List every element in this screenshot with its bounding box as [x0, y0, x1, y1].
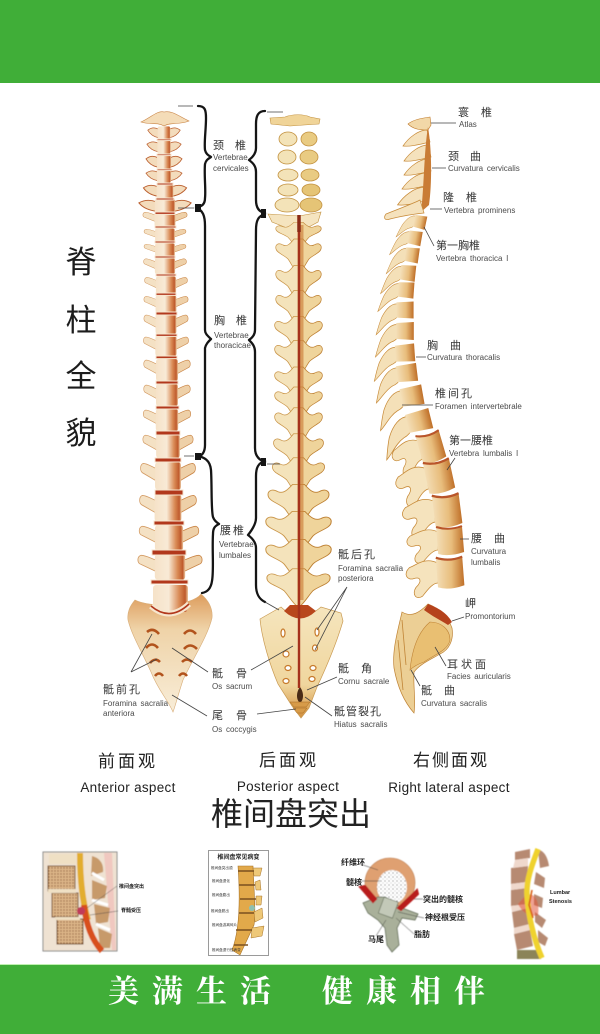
label: vertebra prominens: 隆椎 — [443, 190, 489, 204]
label: lumbar vertebrae: Vertebrae — [219, 540, 254, 549]
label: lumbar curvature: 腰曲 — [471, 532, 517, 545]
labels: sagittal diagram — [119, 883, 144, 914]
label: anterior sacral foramina: Foramina sacralia — [103, 699, 169, 708]
panel: common disc lesions diagram: 椎间盘常见病变 — [217, 853, 260, 861]
panel: common disc lesions diagram: 椎间盘退化 — [212, 878, 230, 883]
caption: anterior aspect — [80, 752, 176, 795]
thoracic processes lateral — [372, 213, 418, 460]
label: lumbar curvature: Curvatura — [471, 547, 507, 556]
panel: common disc lesions diagram: 椎间盘退行性病变 — [212, 947, 241, 952]
bracket junction blobs — [195, 204, 266, 466]
thoracic bodies lateral — [395, 214, 433, 434]
label: sacrum: Os sacrum — [212, 682, 253, 691]
label: thoracic vertebrae: thoracicae — [214, 341, 251, 350]
labels: transverse section: 纤维环 — [341, 857, 365, 867]
bracket: posterior lumbar — [248, 461, 265, 602]
lumbar vertebrae lateral — [390, 430, 464, 598]
panel: common disc lesions diagram — [208, 850, 268, 956]
label: auricular surface: Facies auricularis — [447, 672, 511, 681]
labels: lumbar stenosis: Lumbar — [550, 890, 571, 896]
label: cervical curvature — [448, 150, 520, 173]
title: 脊柱全貌: 貌 — [66, 416, 96, 451]
label: sacral curvature — [421, 684, 487, 708]
slogan — [108, 974, 498, 1009]
bracket: posterior cervical — [249, 111, 265, 213]
slogan: 美满生活 — [108, 974, 284, 1009]
label: sacral cornu: Cornu sacrale — [338, 677, 390, 686]
atlas lateral — [408, 117, 431, 130]
label: promontory: 岬 — [465, 597, 476, 610]
label: auricular surface — [447, 657, 511, 681]
caption: right lateral aspect: Right lateral aspect — [388, 780, 510, 795]
bracket: anterior cervical — [196, 106, 211, 207]
label: anterior sacral foramina — [103, 682, 169, 718]
label: intervertebral foramen: Foramen intervertebrale — [435, 402, 522, 411]
label: thoracic curvature: Curvatura thoracalis — [427, 353, 500, 362]
label: lumbar curvature: lumbalis — [471, 558, 500, 567]
leader lines — [131, 106, 469, 716]
label: first thoracic vertebra: 第一胸椎 — [436, 238, 480, 252]
panel: anterior spine illustration — [128, 112, 212, 712]
bracket: posterior thoracic — [249, 214, 265, 462]
label: first lumbar vertebra — [449, 433, 518, 458]
label: thoracic vertebrae: 胸椎 — [214, 313, 258, 327]
label: sacral curvature: 骶曲 — [421, 684, 467, 697]
label: posterior sacral foramina: Foramina sacralia — [338, 564, 404, 573]
title: 脊柱全貌: 脊 — [66, 245, 96, 280]
slogan: 健康相伴 — [322, 974, 498, 1009]
sacrum posterior — [260, 605, 343, 718]
label: intervertebral foramen: 椎间孔 — [435, 386, 474, 400]
bracket: anterior thoracic — [196, 208, 211, 457]
panel: common disc lesions diagram: 椎间盘脱出 — [211, 908, 229, 913]
bottom green band — [0, 964, 600, 1034]
label: lumbar curvature — [471, 532, 517, 567]
label: atlas: 寰椎 — [458, 105, 504, 119]
bracket: anterior lumbar — [197, 456, 219, 593]
label: cervical vertebrae: cervicales — [213, 164, 249, 173]
label: first lumbar vertebra: 第一腰椎 — [449, 433, 493, 447]
panel: sagittal disc herniation diagram — [43, 852, 118, 951]
label: sacral hiatus: 骶管裂孔 — [334, 704, 382, 718]
panel: transverse disc section — [357, 858, 424, 952]
label: atlas — [458, 105, 504, 129]
label: promontory: Promontorium — [465, 612, 516, 621]
label: thoracic curvature: 胸曲 — [427, 338, 473, 352]
labels: lumbar stenosis: Stenosis — [549, 899, 572, 905]
label: vertebra prominens — [443, 190, 515, 215]
label: sacral hiatus: Hiatus sacralis — [334, 720, 388, 729]
title: 脊柱全貌 — [66, 245, 96, 451]
sacrum anterior — [128, 585, 212, 712]
sacrum lateral — [394, 604, 452, 713]
label: cervical curvature: 颈曲 — [448, 150, 492, 163]
label: sacrum: 骶骨 — [212, 667, 260, 680]
label: promontory — [465, 597, 516, 621]
cervical vertebrae anterior — [139, 126, 191, 213]
panel: lumbar stenosis image — [511, 849, 549, 959]
labels: lumbar stenosis — [549, 890, 572, 905]
label: posterior sacral foramina: 骶后孔 — [338, 548, 377, 561]
thoracic and lumbar vertebrae posterior — [266, 222, 331, 607]
label: coccyx: Os coccygis — [212, 725, 257, 734]
title: 脊柱全貌: 全 — [66, 359, 96, 394]
label: cervical vertebrae — [213, 138, 257, 173]
caption: posterior aspect: 后面观 — [259, 751, 319, 770]
label: thoracic vertebrae: Vertebrae — [214, 331, 249, 340]
thoracic vertebra one wing — [268, 212, 321, 229]
labels: transverse section: 马尾 — [368, 935, 384, 944]
label: sacral hiatus — [334, 704, 388, 729]
panel: common disc lesions diagram: 椎间盘游离碎片 — [212, 922, 238, 927]
label: atlas: Atlas — [459, 120, 477, 129]
label: vertebra prominens: Vertebra prominens — [444, 206, 515, 215]
atlas posterior — [270, 115, 320, 126]
atlas anterior — [141, 112, 189, 126]
label: coccyx — [212, 709, 260, 734]
panel: right lateral spine illustration — [372, 117, 464, 713]
top green band — [0, 0, 600, 83]
label: posterior sacral foramina — [338, 548, 404, 583]
label: first lumbar vertebra: Vertebra lumbalis I — [449, 449, 518, 458]
panel: posterior spine illustration — [260, 115, 343, 718]
title: 脊柱全貌: 柱 — [66, 303, 96, 338]
label: intervertebral foramen — [435, 386, 522, 411]
label: lumbar vertebrae — [219, 523, 254, 560]
caption: anterior aspect: Anterior aspect — [80, 780, 176, 795]
label: auricular surface: 耳状面 — [447, 657, 489, 671]
labels: sagittal diagram: 脊髓受压 — [121, 907, 141, 914]
labels: transverse section: 髓核 — [346, 877, 362, 887]
panel: common disc lesions diagram: 椎间盘膨出 — [212, 892, 230, 897]
label: posterior sacral foramina: posteriora — [338, 574, 374, 583]
label: coccyx: 尾骨 — [212, 709, 260, 722]
caption: right lateral aspect — [388, 751, 510, 795]
label: first thoracic vertebra — [436, 238, 508, 263]
label: anterior sacral foramina: 骶前孔 — [103, 682, 142, 696]
intervertebral discs anterior — [151, 139, 189, 614]
central midline posterior — [299, 215, 301, 688]
thoracic and lumbar vertebrae anterior — [138, 212, 202, 580]
labels: transverse section: 神经根受压 — [425, 912, 465, 922]
labels: transverse section: 脂肪 — [414, 929, 430, 939]
label: first thoracic vertebra: Vertebra thoracica I — [436, 254, 508, 263]
label: cervical vertebrae: Vertebrae — [213, 153, 248, 162]
label: sacral curvature: Curvatura sacralis — [421, 699, 487, 708]
cervical vertebrae lateral — [385, 127, 431, 220]
label: lumbar vertebrae: lumbales — [219, 551, 251, 560]
label: sacral cornu — [338, 662, 390, 686]
labels: transverse section — [341, 857, 465, 944]
label: cervical curvature: Curvatura cervicalis — [448, 164, 520, 173]
caption: posterior aspect: Posterior aspect — [237, 779, 339, 794]
cervical vertebrae posterior — [275, 132, 322, 212]
label: sacrum — [212, 667, 260, 691]
label: thoracic vertebrae — [214, 313, 258, 350]
caption: posterior aspect — [237, 751, 339, 794]
caption: right lateral aspect: 右侧面观 — [413, 751, 489, 770]
label: anterior sacral foramina: anteriora — [103, 709, 135, 718]
label: thoracic curvature — [427, 338, 500, 362]
labels: sagittal diagram: 椎间盘突出 — [119, 883, 144, 890]
heading: 椎间盘突出: 椎间盘突出 — [211, 796, 371, 832]
panel: common disc lesions diagram: 椎间盘突出颈 — [211, 865, 233, 870]
label: sacral cornu: 骶角 — [338, 662, 384, 675]
label: lumbar vertebrae: 腰椎 — [220, 523, 246, 537]
labels: transverse section: 突出的髓核 — [423, 894, 463, 904]
caption: anterior aspect: 前面观 — [98, 752, 158, 771]
label: cervical vertebrae: 颈椎 — [213, 138, 257, 152]
